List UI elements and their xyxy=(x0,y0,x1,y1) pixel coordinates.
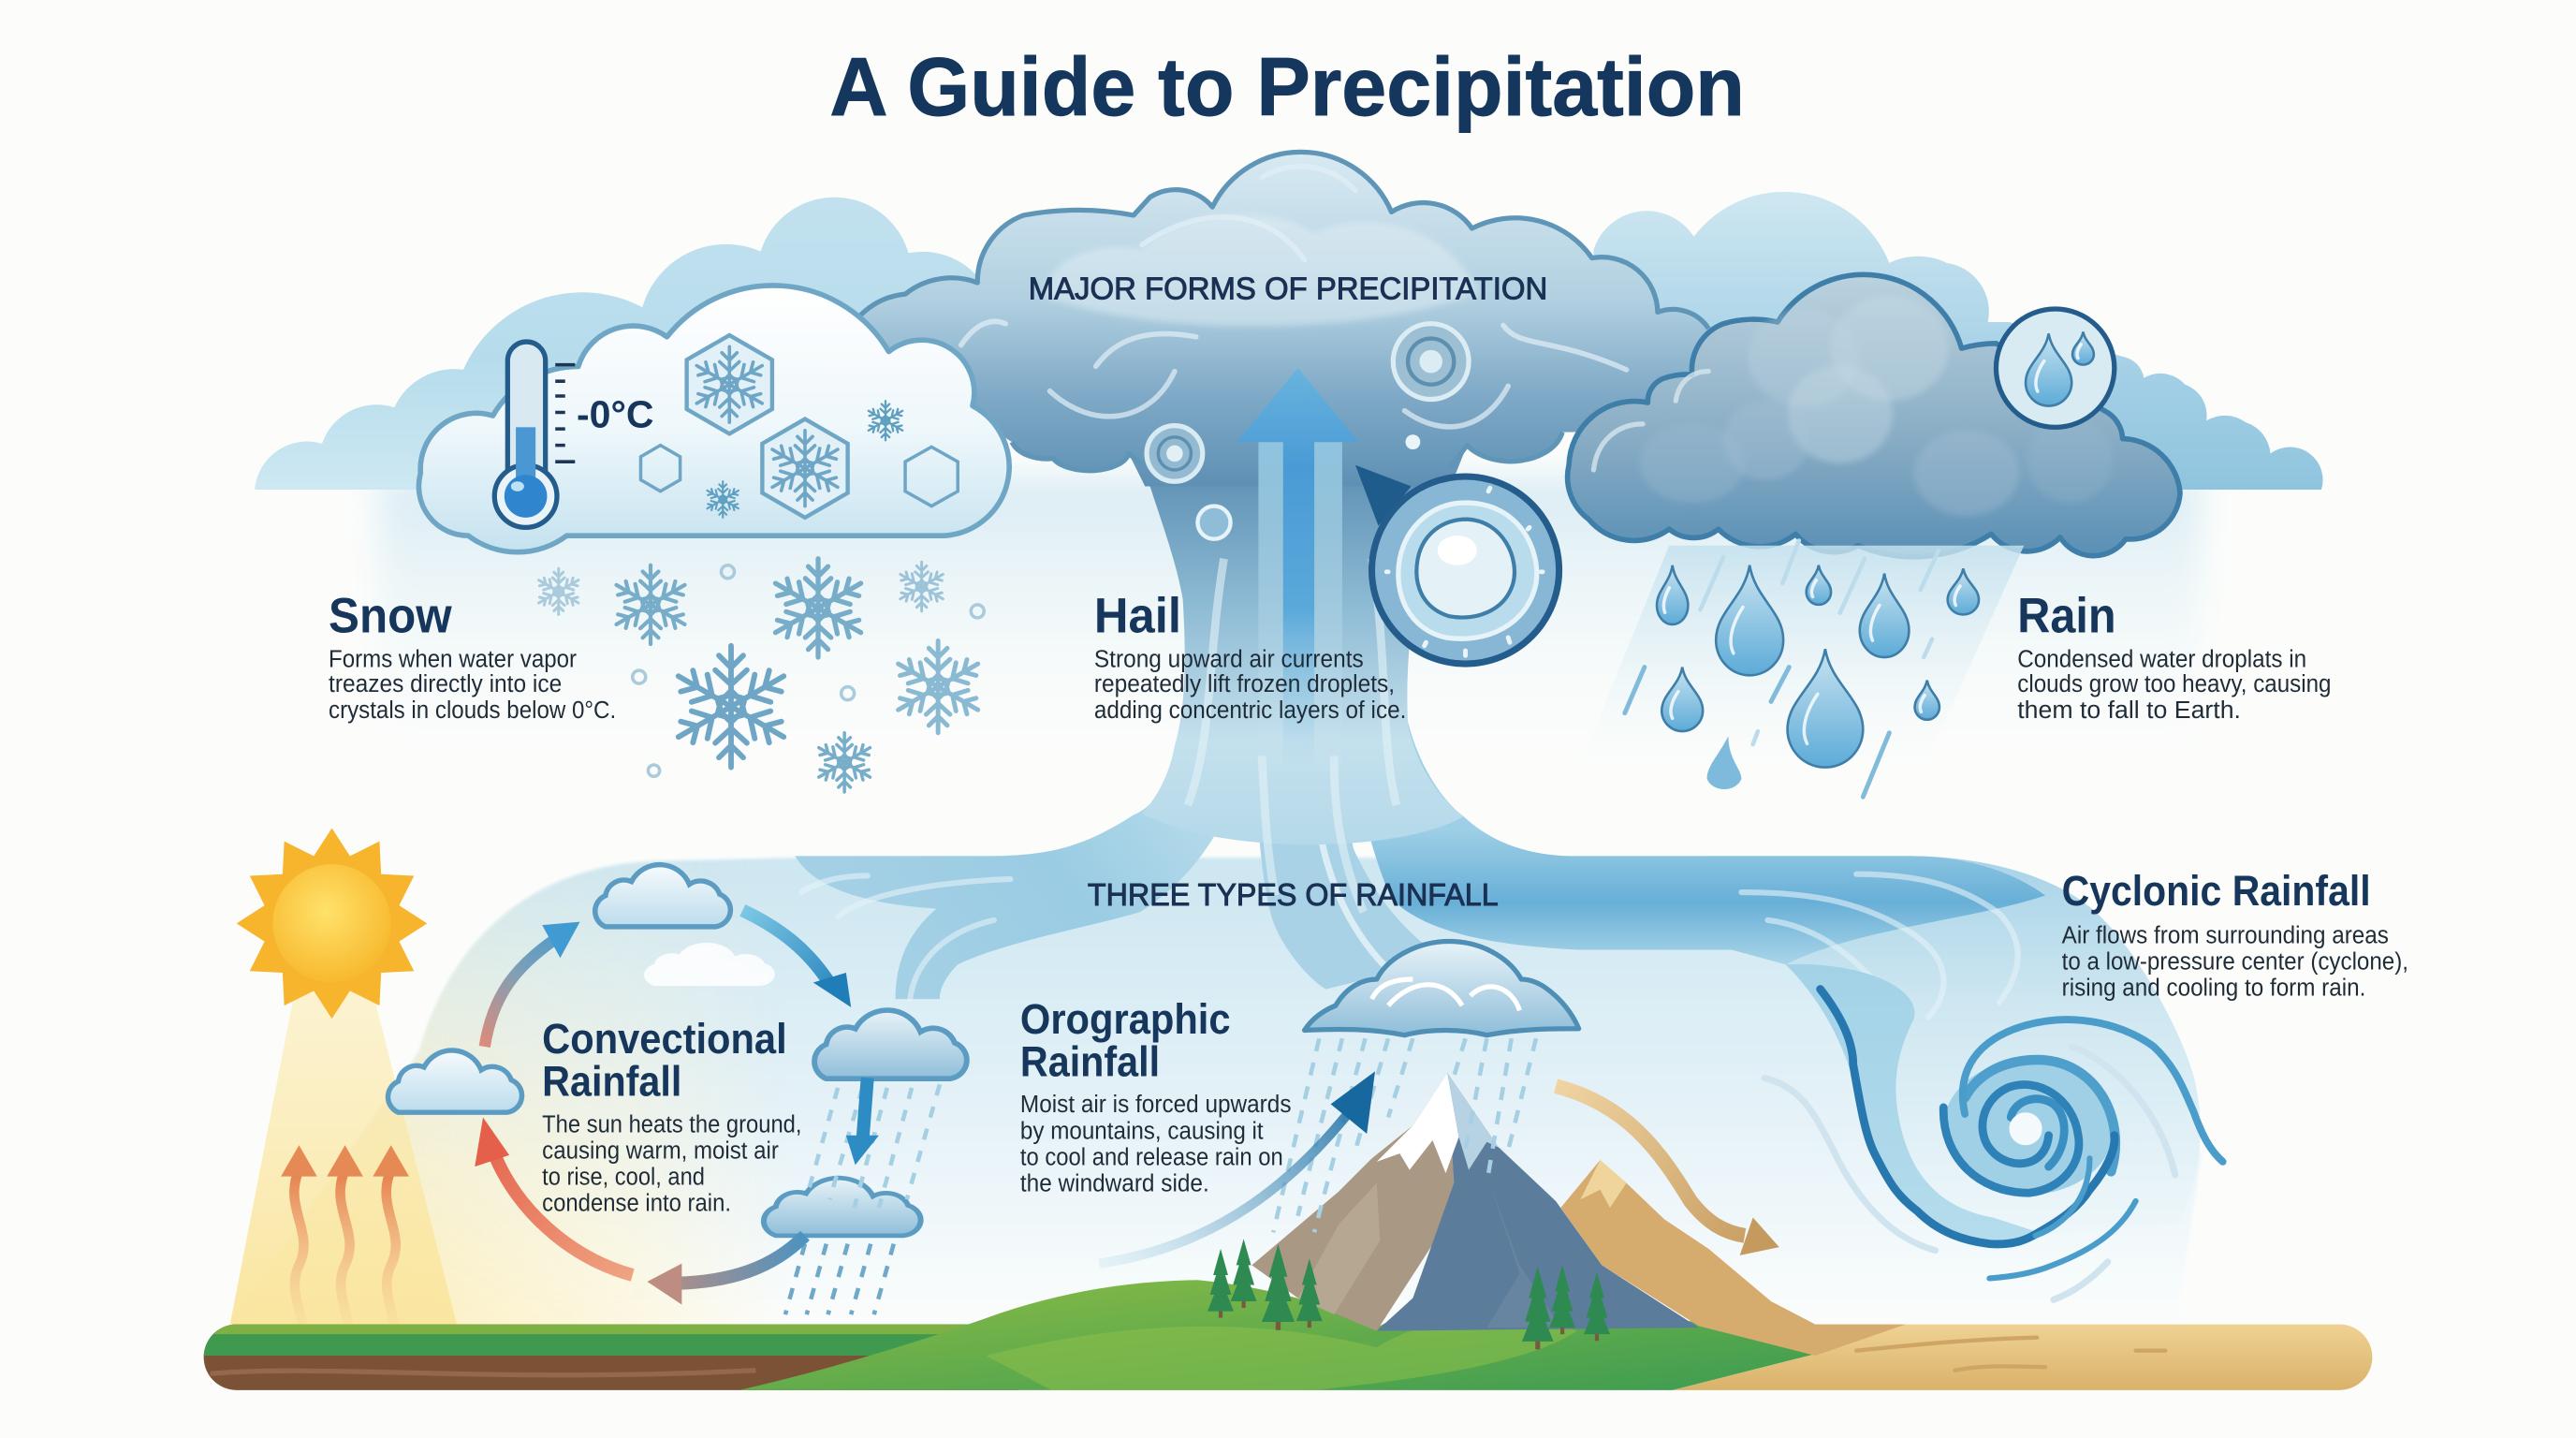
text: cyclonic rainfall: Cyclonic Rainfall xyxy=(2062,867,2371,915)
text: convectional rainfall: condense into rain. xyxy=(542,1189,731,1217)
text: hail: Hail xyxy=(1094,589,1181,644)
rain dashes: mountain xyxy=(1273,1038,1536,1232)
text: convectional rainfall: The sun heats the ground, xyxy=(542,1109,801,1137)
hail stone ring: upper xyxy=(1393,324,1469,399)
small flake bottom xyxy=(705,481,740,518)
central storm cloud xyxy=(842,152,1708,487)
ice crystal large bottom xyxy=(762,419,848,518)
text: rain: clouds grow too heavy, causing xyxy=(2017,669,2331,697)
mountain: tan xyxy=(1560,1160,1906,1356)
arrow: up to top cloud xyxy=(485,922,580,1047)
rain drops xyxy=(1657,565,1979,789)
text: orographic rainfall: Rainfall xyxy=(1020,1038,1160,1086)
rain shaft xyxy=(1577,546,2024,772)
text: orographic rainfall xyxy=(1020,995,1292,1196)
ground: green hills xyxy=(739,1280,1815,1390)
heading: three types: THREE TYPES OF RAINFALL xyxy=(1088,878,1499,913)
rain cloud xyxy=(1568,274,2180,557)
cloud: lower xyxy=(764,1178,921,1236)
hail stone cross-section xyxy=(1372,477,1559,664)
outer wisps xyxy=(1764,1047,2175,1299)
cloud: mountain xyxy=(1305,942,1579,1035)
text: rain: them to fall to Earth. xyxy=(2017,696,2241,724)
cyclone spiral xyxy=(1764,990,2223,1299)
text: orographic rainfall: Moist air is forced upwards xyxy=(1020,1090,1292,1118)
updraft arrow xyxy=(1237,368,1358,772)
background cloud: left xyxy=(255,198,986,490)
falling snowflakes xyxy=(535,559,984,792)
rain streaks: darker xyxy=(1625,668,1889,797)
air flow: cyclone tube xyxy=(1786,964,2039,1244)
inner band xyxy=(1965,1060,2115,1171)
background cloud: right xyxy=(1593,192,2323,490)
spiral disc xyxy=(1943,1060,2115,1195)
heading: major forms: MAJOR FORMS OF PRECIPITATION xyxy=(1029,271,1547,306)
text: snow: crystals in clouds below 0°C. xyxy=(329,696,616,724)
rain dashes: lower cloud xyxy=(785,1244,894,1314)
text: snow: Snow xyxy=(329,589,453,644)
text: snow xyxy=(329,589,616,724)
ice crystal large top xyxy=(687,335,772,433)
ground: desert xyxy=(1673,1325,2372,1390)
ground: left soil and grass xyxy=(204,1325,1018,1390)
hexagon small xyxy=(640,446,681,492)
text: cyclonic rainfall: rising and cooling to form rain. xyxy=(2062,974,2365,1002)
mountain: main xyxy=(1251,1073,1699,1331)
arm: feed line xyxy=(1821,990,2115,1244)
text: snow: Forms when water vapor xyxy=(329,645,577,673)
cloud fill xyxy=(842,152,1708,487)
air flow: trunk xyxy=(1142,460,1464,844)
hail stone ring: lower xyxy=(1147,426,1203,481)
text: hail: adding concentric layers of ice. xyxy=(1094,696,1406,724)
text: hail: repeatedly lift frozen droplets, xyxy=(1094,669,1395,697)
air flow: wisps xyxy=(801,874,2018,1017)
rain drop badge xyxy=(1996,309,2115,427)
panel: rainfall sky backdrop xyxy=(230,858,2202,1325)
snow cloud xyxy=(418,286,1009,552)
air flow: trunk and branches xyxy=(795,460,2201,1244)
text: orographic rainfall: by mountains, causing it xyxy=(1020,1116,1264,1144)
arrow: down xyxy=(846,1078,879,1165)
arrow: bottom xyxy=(648,1236,805,1305)
cloud shape xyxy=(1568,274,2180,557)
cloud billows xyxy=(1043,214,1479,326)
trees: right group xyxy=(1522,1265,1610,1349)
arrow: orographic upward xyxy=(1099,1071,1375,1264)
hail stone tiny xyxy=(1405,434,1420,449)
arm: inner spiral xyxy=(1943,1085,2079,1193)
heat arrows xyxy=(281,1145,409,1325)
rain streaks xyxy=(1701,540,1939,744)
rain dashes: right cloud xyxy=(809,1084,940,1208)
text: convectional rainfall xyxy=(542,1015,801,1217)
hexagon right xyxy=(905,447,958,506)
air flow: left branch xyxy=(795,736,1253,999)
hail stone small xyxy=(1197,506,1231,539)
hail pointer xyxy=(1355,465,1412,526)
air flow: right band xyxy=(1345,707,2045,964)
hub xyxy=(2009,1112,2042,1145)
sky haze below upper clouds xyxy=(378,477,2202,788)
text: rain xyxy=(2017,589,2331,724)
air flow: central sliver xyxy=(1314,788,1388,970)
text: rain: Condensed water droplats in xyxy=(2017,645,2306,673)
temperature label: -0°C xyxy=(577,392,654,435)
cloud shape xyxy=(418,286,1009,552)
text: rain: Rain xyxy=(2017,589,2116,644)
arm: core crescent xyxy=(2011,1099,2064,1167)
air flow: cyclone feed xyxy=(1708,856,2201,1236)
text: hail: Strong upward air currents xyxy=(1094,645,1364,673)
text: cyclonic rainfall: to a low-pressure center (cyclone), xyxy=(2062,947,2408,976)
air flow: trunk highlights xyxy=(1188,559,1397,912)
arm: lower tail xyxy=(1989,1158,2136,1278)
trees: left group xyxy=(1208,1239,1323,1330)
air flow: central stream xyxy=(1253,740,1445,990)
cloud: faint white xyxy=(644,943,775,986)
text: orographic rainfall: to cool and release rain on xyxy=(1020,1142,1283,1170)
text: orographic rainfall: the windward side. xyxy=(1020,1168,1209,1196)
text: convectional rainfall: Rainfall xyxy=(542,1058,681,1106)
text: cyclonic rainfall: Air flows from surrounding areas xyxy=(2062,920,2389,948)
text: snow: treazes directly into ice xyxy=(329,669,562,697)
arrow: leeward descent xyxy=(1556,1086,1779,1255)
cloud: top small xyxy=(595,865,730,927)
thermometer xyxy=(494,342,575,527)
text: cyclonic rainfall xyxy=(2062,867,2408,1002)
sun beam xyxy=(230,986,457,1325)
text: convectional rainfall: Convectional xyxy=(542,1015,787,1063)
cloud outline xyxy=(842,152,1708,471)
warm air tint xyxy=(230,921,739,1325)
small flake right xyxy=(866,401,905,440)
text: convectional rainfall: to rise, cool, and xyxy=(542,1162,705,1190)
text: convectional rainfall: causing warm, moist air xyxy=(542,1136,779,1164)
title: A Guide to Precipitation xyxy=(829,41,1745,133)
cloud billows xyxy=(1640,296,2113,516)
arrow: top to right cloud xyxy=(742,910,851,1007)
text: hail xyxy=(1094,589,1406,724)
sun xyxy=(237,829,427,1019)
arrow: red xyxy=(475,1117,633,1275)
cloud: left small xyxy=(388,1050,522,1112)
arm: top xyxy=(1963,1020,2223,1162)
text: orographic rainfall: Orographic xyxy=(1020,995,1231,1043)
cloud: right xyxy=(814,1010,967,1078)
